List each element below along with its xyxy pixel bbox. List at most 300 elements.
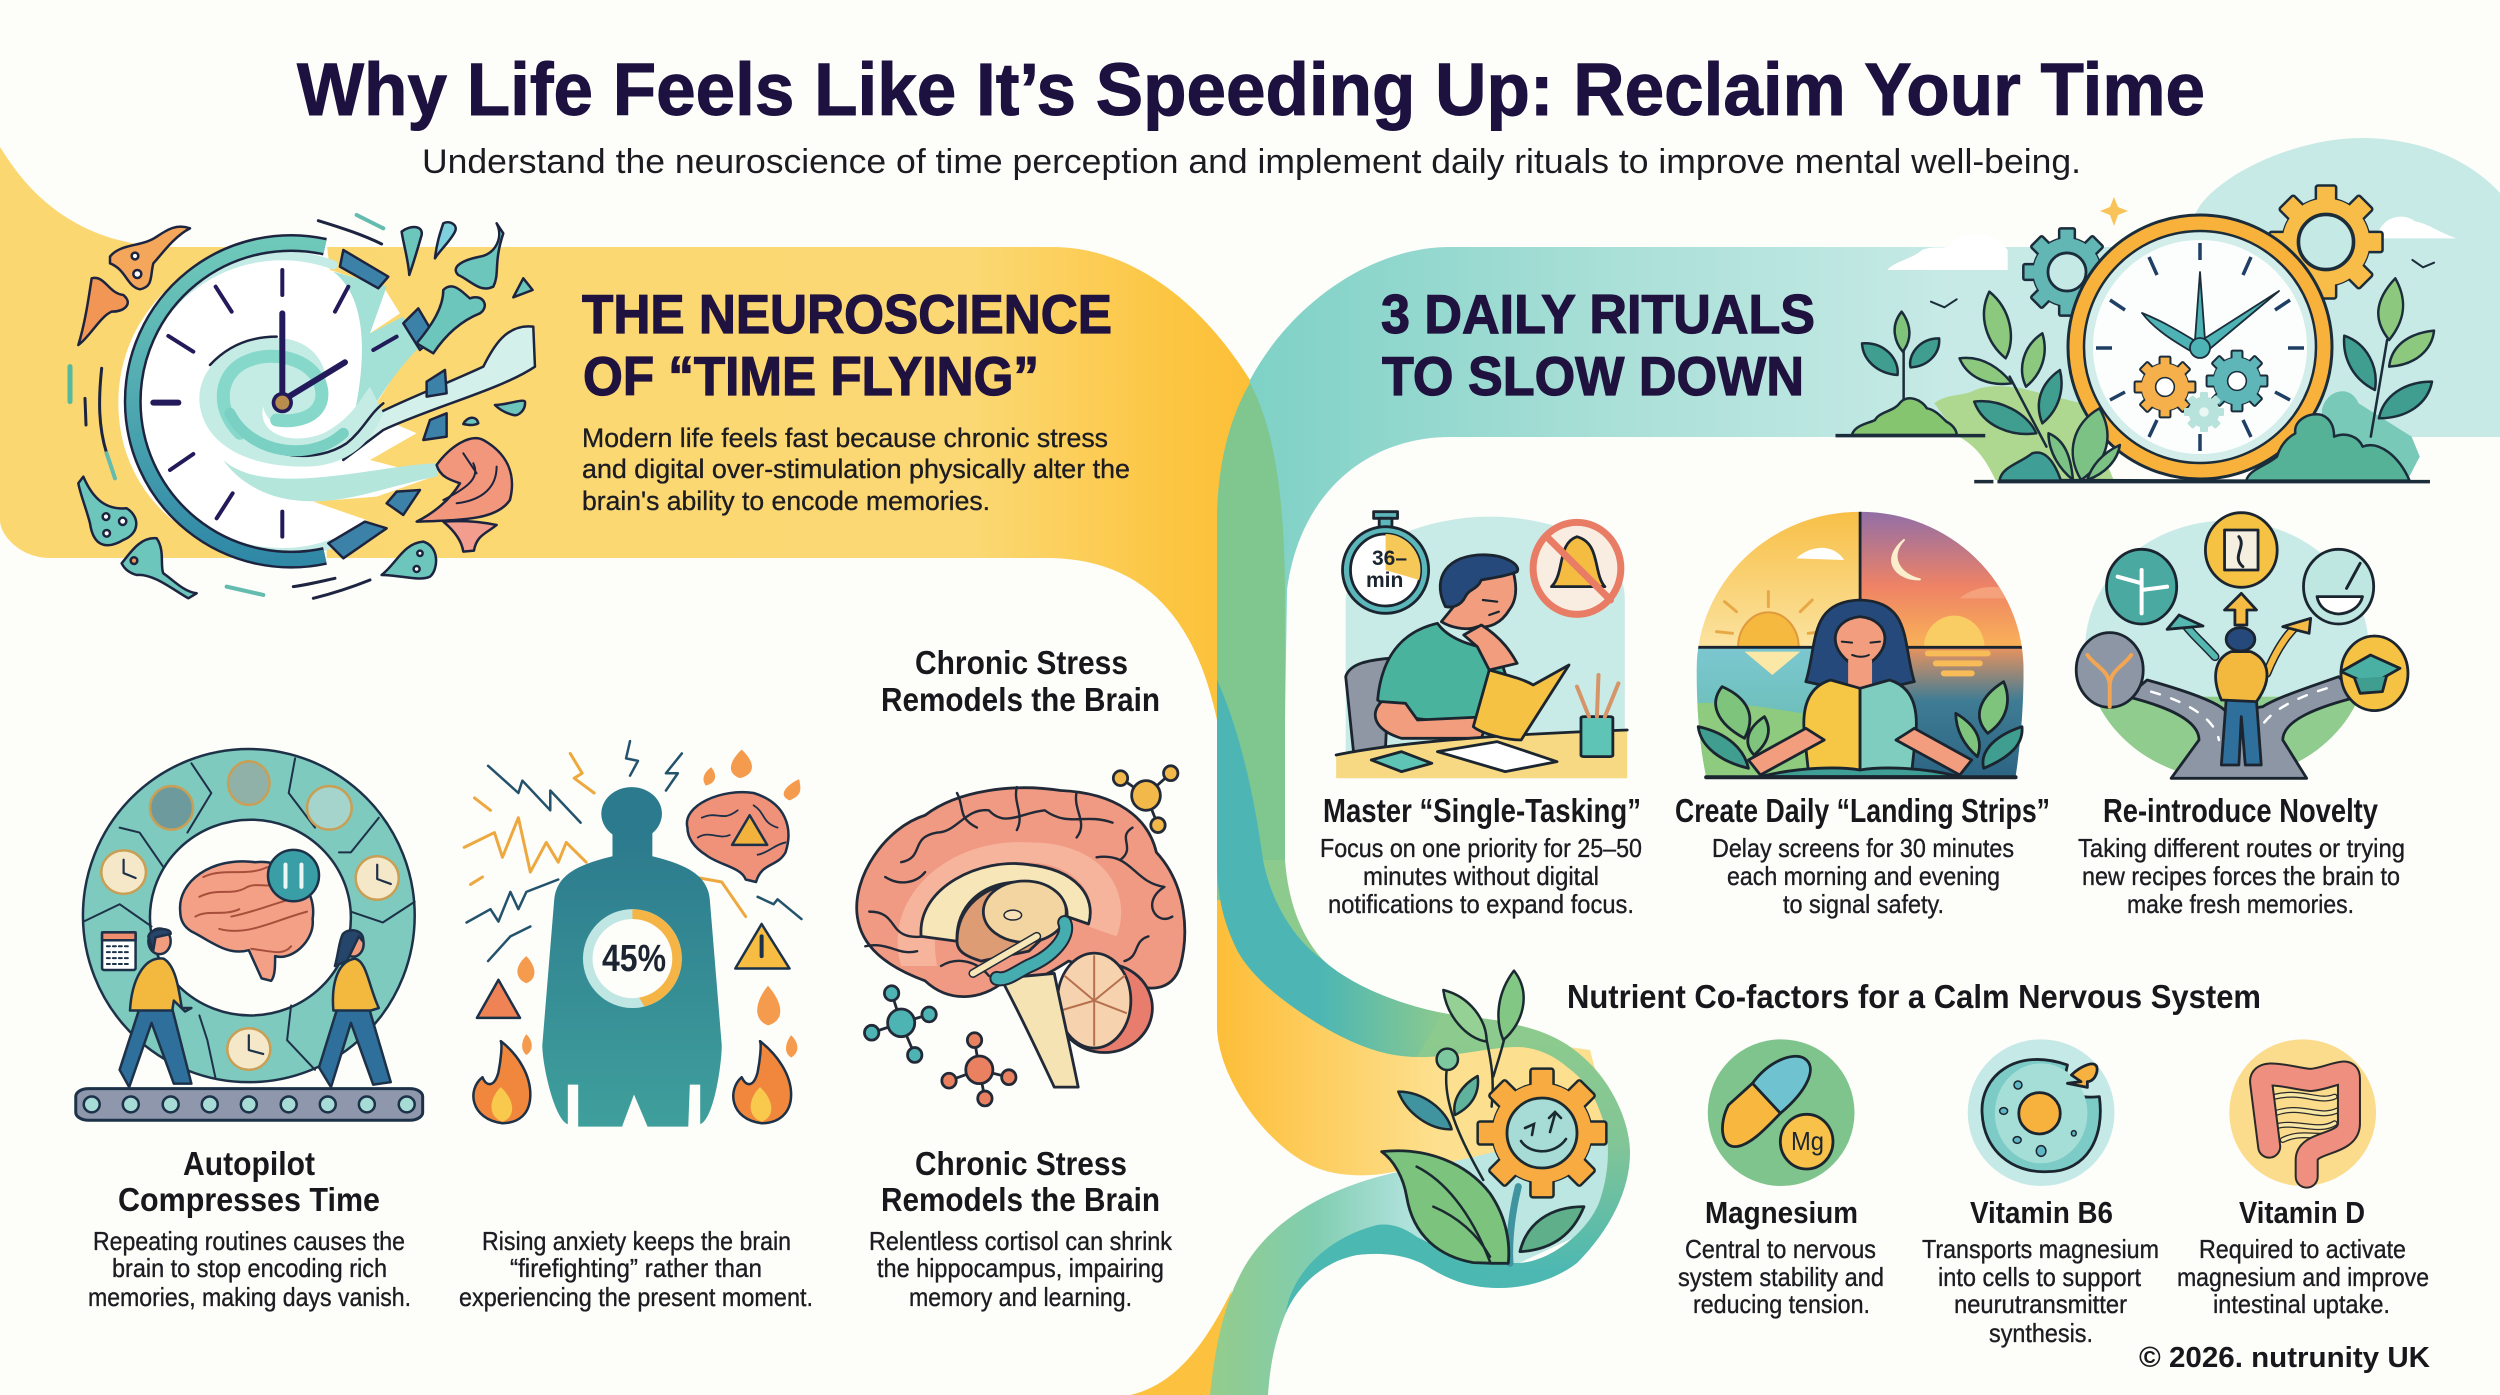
swirl wedges	[333, 272, 420, 433]
clock ring colour	[133, 243, 325, 560]
clock rim inner	[2084, 231, 2316, 463]
ring segment lines	[84, 758, 415, 1077]
small leaf	[1454, 1076, 1478, 1115]
text: single-tasking: minutes without digital	[1363, 861, 1599, 891]
hair	[335, 930, 363, 966]
spiral outer sweep	[210, 337, 383, 456]
clock hands	[2142, 272, 2279, 358]
arrow left shaft	[2185, 624, 2215, 657]
right hand	[2199, 291, 2279, 352]
big leaf	[1382, 1151, 1509, 1263]
illustration: landing strips	[1689, 510, 2032, 781]
right leaves	[1956, 682, 2022, 768]
sun	[1738, 612, 1799, 647]
uptake arrow	[2067, 1064, 2097, 1087]
calendar header	[102, 932, 136, 940]
evening sun	[1924, 616, 1984, 647]
hippocampus	[997, 923, 1066, 979]
clock ring dark	[133, 243, 325, 560]
text: chronic stress heading: Chronic Stress	[915, 1145, 1127, 1182]
inner pale ring	[134, 256, 333, 552]
text: autopilot body: memories, making days vanish.	[88, 1282, 411, 1312]
legs	[1760, 768, 1960, 777]
text: landing strips: to signal safety.	[1783, 889, 1944, 919]
spiral band	[230, 413, 343, 451]
no-bell ring	[1533, 522, 1621, 614]
deep brain	[957, 883, 1066, 961]
berry	[1437, 1049, 1458, 1070]
text: neuroscience intro	[582, 423, 1130, 516]
wheel centre	[150, 820, 351, 1015]
book	[1473, 665, 1569, 740]
sparkle	[2100, 197, 2128, 226]
hair	[1440, 555, 1518, 607]
pause badge	[268, 850, 319, 901]
top leaf	[1498, 971, 1524, 1040]
flame left	[473, 1041, 530, 1123]
text: anxiety body	[459, 1226, 813, 1312]
minute hand	[2195, 272, 2205, 340]
brain fragment	[417, 438, 512, 522]
cell	[1982, 1059, 2100, 1172]
stopwatch label: 36–	[1372, 547, 1407, 570]
centre brain	[180, 861, 313, 981]
cerebellum	[1057, 953, 1131, 1048]
back hill left	[1934, 386, 2114, 480]
hands	[282, 313, 345, 400]
flame right core	[751, 1087, 771, 1122]
warning yellow mark	[760, 936, 764, 956]
stopwatch label 2: min	[1366, 569, 1403, 592]
small bush	[1852, 398, 1957, 435]
hand and arm	[1464, 625, 1517, 670]
capsule orange	[1722, 1083, 1780, 1147]
flame left core	[491, 1087, 512, 1122]
cell inner	[1995, 1063, 2087, 1163]
text: vitamin B6	[1922, 1195, 2159, 1348]
wheel ring	[83, 749, 415, 1082]
faded gear	[2184, 392, 2224, 432]
arrow left head	[2167, 615, 2203, 629]
arrow left	[2167, 615, 2215, 657]
thalamus	[983, 881, 1066, 942]
limbic band	[898, 842, 1121, 966]
text: autopilot heading: Autopilot	[183, 1145, 315, 1182]
gear	[1478, 1069, 1606, 1197]
person legs	[2221, 700, 2261, 765]
illustration: anxious silhouette	[464, 741, 801, 1127]
illustration: novelty crossroads	[2076, 513, 2408, 780]
text: vitamin B6: neurutransmitter	[1954, 1289, 2127, 1319]
cerebellum folds	[1061, 956, 1126, 1045]
badge hands	[124, 860, 391, 1054]
brain fragment folds	[443, 453, 497, 503]
illustration: calm clock with gears and plants	[1836, 185, 2456, 482]
ribbon: light teal interior	[1393, 1125, 1612, 1272]
woman hair	[1806, 600, 1914, 687]
left leaves	[1960, 292, 2062, 447]
badge left lower	[2076, 633, 2143, 707]
badge right	[2303, 549, 2374, 624]
text: chronic stress heading: Remodels the Brain	[881, 1181, 1160, 1218]
icon: shattering clock	[70, 215, 535, 598]
table edge	[1336, 730, 1627, 755]
thalamus centre	[1004, 910, 1022, 920]
copyright: © 2026. nutrunity UK	[2139, 1342, 2430, 1374]
text: anxiety body: “firefighting” rather than	[510, 1253, 762, 1283]
back hill right	[2322, 391, 2420, 480]
text: landing strips: Create Daily “Landing Strips”	[1675, 792, 2050, 829]
text: magnesium: Magnesium	[1705, 1195, 1858, 1230]
cerebrum folds	[865, 787, 1172, 976]
cap base	[2355, 677, 2386, 693]
text: vitamin D: intestinal uptake.	[2213, 1289, 2390, 1319]
text: anxiety body: Rising anxiety keeps the brain	[482, 1226, 791, 1256]
heading: chronic stress top	[881, 644, 1160, 718]
text: landing strips: Delay screens for 30 minutes	[1712, 833, 2014, 863]
face	[1441, 572, 1516, 629]
top right half	[1860, 680, 1916, 777]
text: vitamin B6: into cells to support	[1938, 1262, 2142, 1292]
amygdala	[973, 936, 1037, 973]
birds	[1931, 260, 2434, 307]
arrow up	[2225, 593, 2256, 625]
cloud right	[1960, 587, 2006, 598]
arrow left colour	[2185, 624, 2215, 657]
woman neck	[1848, 660, 1872, 688]
text: single-tasking: notifications to expand focus.	[1328, 889, 1634, 919]
badge	[2229, 1039, 2376, 1186]
gauge value: 45%	[602, 938, 666, 980]
hair	[148, 929, 171, 951]
text: magnesium	[1678, 1195, 1884, 1319]
text: vitamin B6: synthesis.	[1989, 1318, 2093, 1348]
divider	[1858, 512, 1862, 599]
text: autopilot body: brain to stop encoding rich	[112, 1253, 387, 1283]
stressed brain folds	[698, 805, 786, 855]
icon: vitamin D intestine	[2229, 1039, 2376, 1186]
road	[2127, 677, 2359, 778]
text: vitamin D: Required to activate	[2199, 1234, 2406, 1264]
icon: vitamin B6 cell	[1968, 1039, 2114, 1186]
table	[1336, 730, 1627, 778]
swoosh lower	[223, 460, 440, 501]
nucleus	[2019, 1093, 2060, 1134]
grass	[2079, 697, 2374, 780]
right plant	[2344, 278, 2434, 437]
stressed brain	[687, 792, 788, 882]
small intestine	[2275, 1095, 2339, 1140]
walker left	[120, 928, 191, 1087]
eye	[1483, 600, 1499, 615]
text: novelty	[2078, 792, 2405, 919]
body silhouette	[542, 833, 722, 1127]
walker right	[319, 930, 391, 1087]
cap	[2341, 655, 2400, 685]
ground line left	[1836, 434, 1985, 437]
text: novelty: make fresh memories.	[2127, 889, 2354, 919]
top left half	[1804, 680, 1860, 777]
text: vitamin B6: Transports magnesium	[1922, 1234, 2159, 1264]
text: landing strips: each morning and evening	[1727, 861, 2000, 891]
neurons teal	[78, 222, 533, 598]
hub gold	[275, 396, 289, 410]
illustration: single-tasking	[1336, 512, 1627, 778]
stopwatch face	[1350, 534, 1421, 606]
text: autopilot body	[88, 1226, 411, 1312]
morning sky	[1689, 510, 1860, 647]
clock face	[118, 240, 433, 564]
small plant	[1862, 312, 1939, 400]
pause bars	[286, 865, 301, 887]
heading: chronic stress top: Chronic Stress	[915, 644, 1128, 681]
neurons orange	[78, 227, 190, 345]
leaf vein	[1417, 1167, 1490, 1262]
ribbon: teal wedge	[1217, 680, 1443, 1057]
right arm	[1896, 728, 1972, 775]
small gear orange	[2135, 357, 2195, 417]
chair	[1346, 658, 1390, 753]
foreground foliage	[1836, 408, 2430, 482]
sky backdrop	[2079, 517, 2374, 697]
badge	[1968, 1039, 2114, 1186]
calendar	[102, 932, 136, 970]
badge left	[2107, 549, 2177, 624]
hippocampus fill	[997, 923, 1066, 979]
heading line 1: THE NEUROSCIENCE	[582, 283, 1112, 345]
text: vitamin D	[2177, 1195, 2429, 1319]
ground line right	[1974, 480, 2430, 483]
heading: chronic stress top: Remodels the Brain	[881, 681, 1160, 718]
brain warning	[732, 815, 767, 845]
left leaves	[1698, 687, 1768, 768]
illustration: autopilot wheel	[76, 749, 423, 1120]
cerebrum	[857, 788, 1185, 997]
subtitle: Understand the neuroscience of time perception and implement daily rituals to improve mental well-being.	[422, 143, 2081, 181]
hub	[272, 392, 293, 413]
cup	[1581, 717, 1613, 757]
morning land	[1697, 702, 1806, 776]
conveyor rollers	[84, 1097, 415, 1112]
tablet	[1437, 742, 1557, 772]
front leaves	[1382, 1151, 1584, 1263]
arrow right	[2267, 618, 2311, 673]
right leaf	[1520, 1207, 1584, 1252]
text: magnesium: reducing tension.	[1693, 1289, 1870, 1319]
hub	[2190, 338, 2210, 358]
person head	[2226, 628, 2255, 651]
text: magnesium: system stability and	[1678, 1262, 1884, 1292]
arrow right shaft	[2267, 626, 2296, 673]
amygdala fill	[973, 936, 1037, 973]
ribbon: lower teal band	[1285, 1224, 1500, 1315]
small flames	[517, 750, 800, 1057]
colon fill	[2261, 1072, 2349, 1177]
woman features	[1842, 642, 1880, 657]
head silhouette	[601, 787, 662, 840]
spoon	[2347, 563, 2360, 588]
evening sea	[1904, 648, 2024, 776]
evening reflection	[1928, 653, 1988, 673]
morning sea	[1696, 647, 1817, 776]
small gear teal	[2207, 351, 2267, 411]
badge left sign	[2118, 570, 2167, 613]
brain folds	[195, 867, 307, 952]
clock face	[2093, 240, 2307, 454]
head	[148, 928, 171, 954]
heading: nutrient co-factors: Nutrient Co-factors for a Calm Nervous System	[1567, 978, 2261, 1015]
brain fragment stem	[443, 521, 497, 552]
motion strokes	[85, 221, 382, 598]
flame right	[733, 1041, 791, 1123]
ribbon: yellow lower blob	[1217, 860, 1610, 1175]
heading: 3 daily rituals	[1381, 283, 1815, 407]
gauge arc	[632, 909, 682, 1007]
warning red	[477, 980, 520, 1018]
text: autopilot heading	[118, 1145, 380, 1218]
text: vitamin D: magnesium and improve	[2177, 1262, 2429, 1292]
heading: neuroscience	[582, 283, 1112, 407]
text: autopilot body: Repeating routines causes the	[93, 1226, 405, 1256]
calendar grid	[107, 946, 131, 964]
heading line 1: 3 DAILY RITUALS	[1381, 283, 1815, 345]
ring badges	[101, 761, 399, 1070]
corpus callosum	[921, 864, 1090, 941]
legs	[120, 1006, 191, 1087]
gauge centre	[593, 919, 672, 998]
gear face	[1507, 1098, 1577, 1168]
stem	[1510, 1187, 1518, 1263]
text: chronic stress body: the hippocampus, impairing	[877, 1253, 1164, 1283]
badge top art	[2238, 537, 2243, 567]
teal streaks	[107, 215, 383, 595]
person torso	[2216, 652, 2267, 702]
sun reflection	[1744, 652, 1800, 675]
stems	[1446, 1040, 1504, 1180]
colon outline	[2261, 1072, 2349, 1177]
torso	[130, 958, 191, 1011]
arch backdrop	[1346, 517, 1625, 778]
left cloud	[1887, 234, 2008, 270]
text: landing strips	[1675, 792, 2050, 919]
horizon	[1697, 646, 2024, 649]
molecule red	[942, 1033, 1016, 1106]
torso	[333, 959, 379, 1010]
brainstem	[1001, 973, 1078, 1087]
left arm	[1748, 728, 1824, 775]
text: single-tasking: Focus on one priority for 25–50	[1320, 833, 1642, 863]
text: chronic stress body: memory and learning.	[909, 1282, 1132, 1312]
text: chronic stress body	[869, 1226, 1173, 1312]
ribbon: main S curve	[1217, 860, 1630, 1288]
badge top frame	[2225, 530, 2258, 570]
stopwatch stem	[1379, 518, 1392, 528]
text: vitamin B6: Vitamin B6	[1970, 1195, 2113, 1230]
left top leaf	[1443, 990, 1487, 1042]
right cloud	[2377, 217, 2456, 238]
lightning yellow	[464, 753, 746, 917]
spiral	[223, 356, 322, 433]
text: neuroscience intro: and digital over-stimulation physically alter the	[582, 454, 1130, 484]
small intestine light	[2275, 1095, 2339, 1140]
clock rim	[2068, 215, 2332, 479]
text: neuroscience intro: brain's ability to encode memories.	[582, 486, 990, 516]
back leaves and stems	[1398, 971, 1524, 1180]
teal mound	[2000, 453, 2248, 481]
text: novelty: Re-introduce Novelty	[2103, 792, 2379, 829]
text: novelty: new recipes forces the brain to	[2082, 861, 2400, 891]
sun rays	[1717, 592, 1824, 633]
gear smile	[1521, 1112, 1566, 1151]
cloud left	[1796, 548, 1844, 560]
gold gear	[2269, 185, 2383, 299]
illustration: plant and gear	[1382, 971, 1606, 1263]
stopwatch progress	[1386, 534, 1420, 580]
text: autopilot heading: Compresses Time	[118, 1181, 380, 1218]
fork road	[2087, 655, 2131, 707]
bell	[1551, 537, 1605, 587]
stopwatch knob	[1374, 512, 1398, 518]
no-bell slash	[1547, 537, 1610, 600]
head	[343, 931, 364, 957]
ground	[1706, 775, 2016, 779]
text: vitamin D: Vitamin D	[2239, 1195, 2365, 1230]
left hand	[2142, 313, 2202, 353]
road lanes	[2151, 688, 2327, 743]
title: Why Life Feels Like It’s Speeding Up: Reclaim Your Time	[297, 48, 2205, 131]
motion dashes	[67, 367, 72, 402]
coin	[1780, 1114, 1833, 1169]
heading line 2: TO SLOW DOWN	[1382, 345, 1804, 407]
pencils	[1577, 675, 1618, 717]
front leaves	[2048, 408, 2120, 480]
text: magnesium: Central to nervous	[1685, 1234, 1876, 1264]
badge right lower	[2341, 636, 2408, 711]
cerebellum red back	[1057, 964, 1152, 1053]
ribbon: bottom yellow wedge	[1130, 1290, 1232, 1395]
molecule gold	[1113, 766, 1178, 833]
swirl body	[199, 338, 383, 467]
torso	[1378, 623, 1505, 727]
conveyor	[76, 1089, 423, 1120]
ribbon: yellow neuroscience band	[0, 147, 1260, 720]
phone	[1371, 752, 1432, 772]
illustration: big brain	[857, 766, 1185, 1106]
warning yellow	[735, 924, 790, 968]
nuclei	[103, 253, 423, 572]
forearm	[1375, 702, 1489, 738]
teal gear	[2023, 228, 2111, 316]
text: single-tasking: Master “Single-Tasking”	[1323, 792, 1641, 829]
ribbon: green stripe	[1217, 383, 1285, 900]
bowl	[2317, 597, 2363, 614]
swoosh upper	[343, 326, 535, 460]
text: chronic stress heading	[881, 1145, 1160, 1218]
badge	[1708, 1039, 1855, 1186]
text: single-tasking	[1320, 792, 1642, 919]
moon	[1892, 540, 1920, 579]
molecule teal	[864, 986, 936, 1062]
arrow right colour	[2267, 626, 2296, 673]
badge top	[2205, 513, 2277, 587]
evening sky	[1860, 510, 2032, 647]
stopwatch case	[1343, 527, 1429, 613]
back foliage and plants	[1852, 217, 2456, 480]
gauge ring	[583, 909, 682, 1008]
ticks	[153, 270, 397, 537]
text: neuroscience intro: Modern life feels fast because chronic stress	[582, 423, 1108, 453]
shards	[328, 250, 447, 558]
